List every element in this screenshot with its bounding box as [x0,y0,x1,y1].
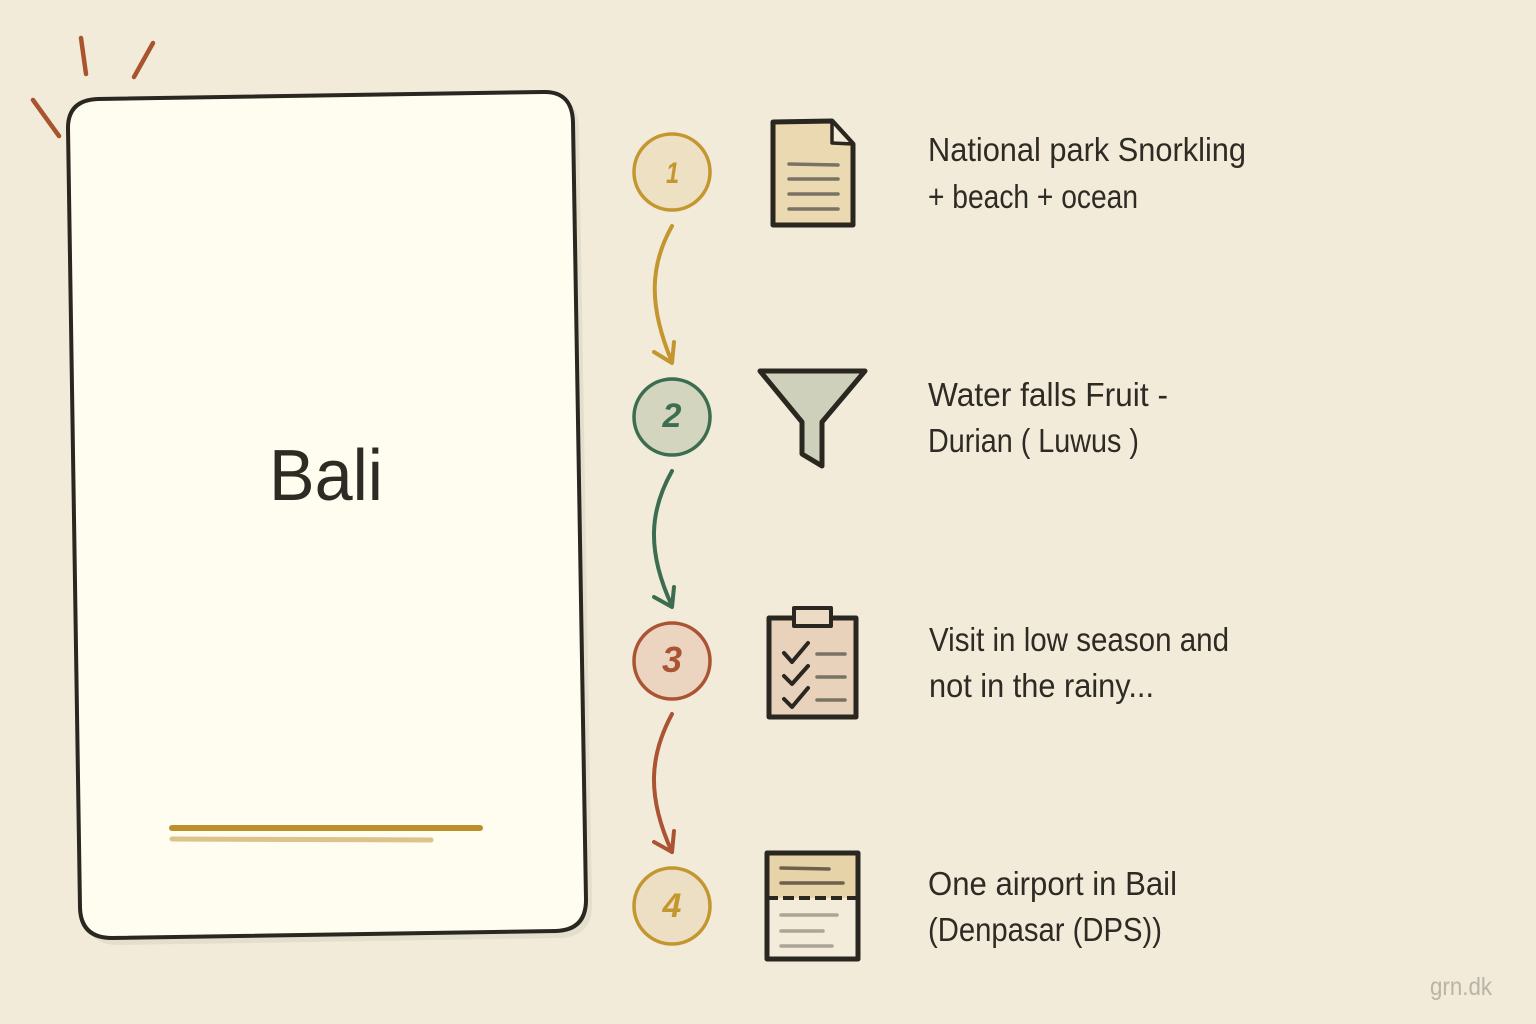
text: step 2 [928,376,1168,459]
step 4 number circle: 4 [662,887,682,925]
text: step 2: Water falls Fruit - [928,376,1168,413]
text: step 4 [928,865,1177,948]
icon: funnel [760,371,865,466]
text: step 1: National park Snorkling [928,131,1246,168]
step 3 number circle [634,623,710,699]
text: step 2: Durian ( Luwus ) [928,422,1139,459]
icon: emphasis rays [33,38,153,136]
step 1 number circle [634,134,710,210]
text: step 1 [928,131,1246,215]
step 2 number circle [634,379,710,455]
step 1 number circle: 1 [666,157,679,190]
step 3 number circle: 3 [662,639,682,680]
text: step 4: One airport in Bail [928,865,1177,902]
icon: checklist clipboard [769,608,856,717]
arrow: 2 to 3 [654,471,674,607]
panel: Bali card [68,92,592,945]
step 2 number circle: 2 [662,397,682,435]
heading: Bali: Bali [269,436,383,516]
text: step 3: Visit in low season and [929,621,1229,658]
step 4 number circle [634,868,710,944]
icon: document [773,121,853,225]
text: step 3 [929,621,1229,704]
underline: gold bars [172,828,480,840]
text: step 4: (Denpasar (DPS)) [928,911,1162,948]
text: step 1: + beach + ocean [928,178,1138,215]
watermark: grn.dk [1430,973,1492,1001]
arrow: 3 to 4 [654,714,674,852]
arrow: 1 to 2 [654,226,674,363]
text: step 3: not in the rainy... [929,667,1154,704]
icon: ticket form [767,853,858,959]
